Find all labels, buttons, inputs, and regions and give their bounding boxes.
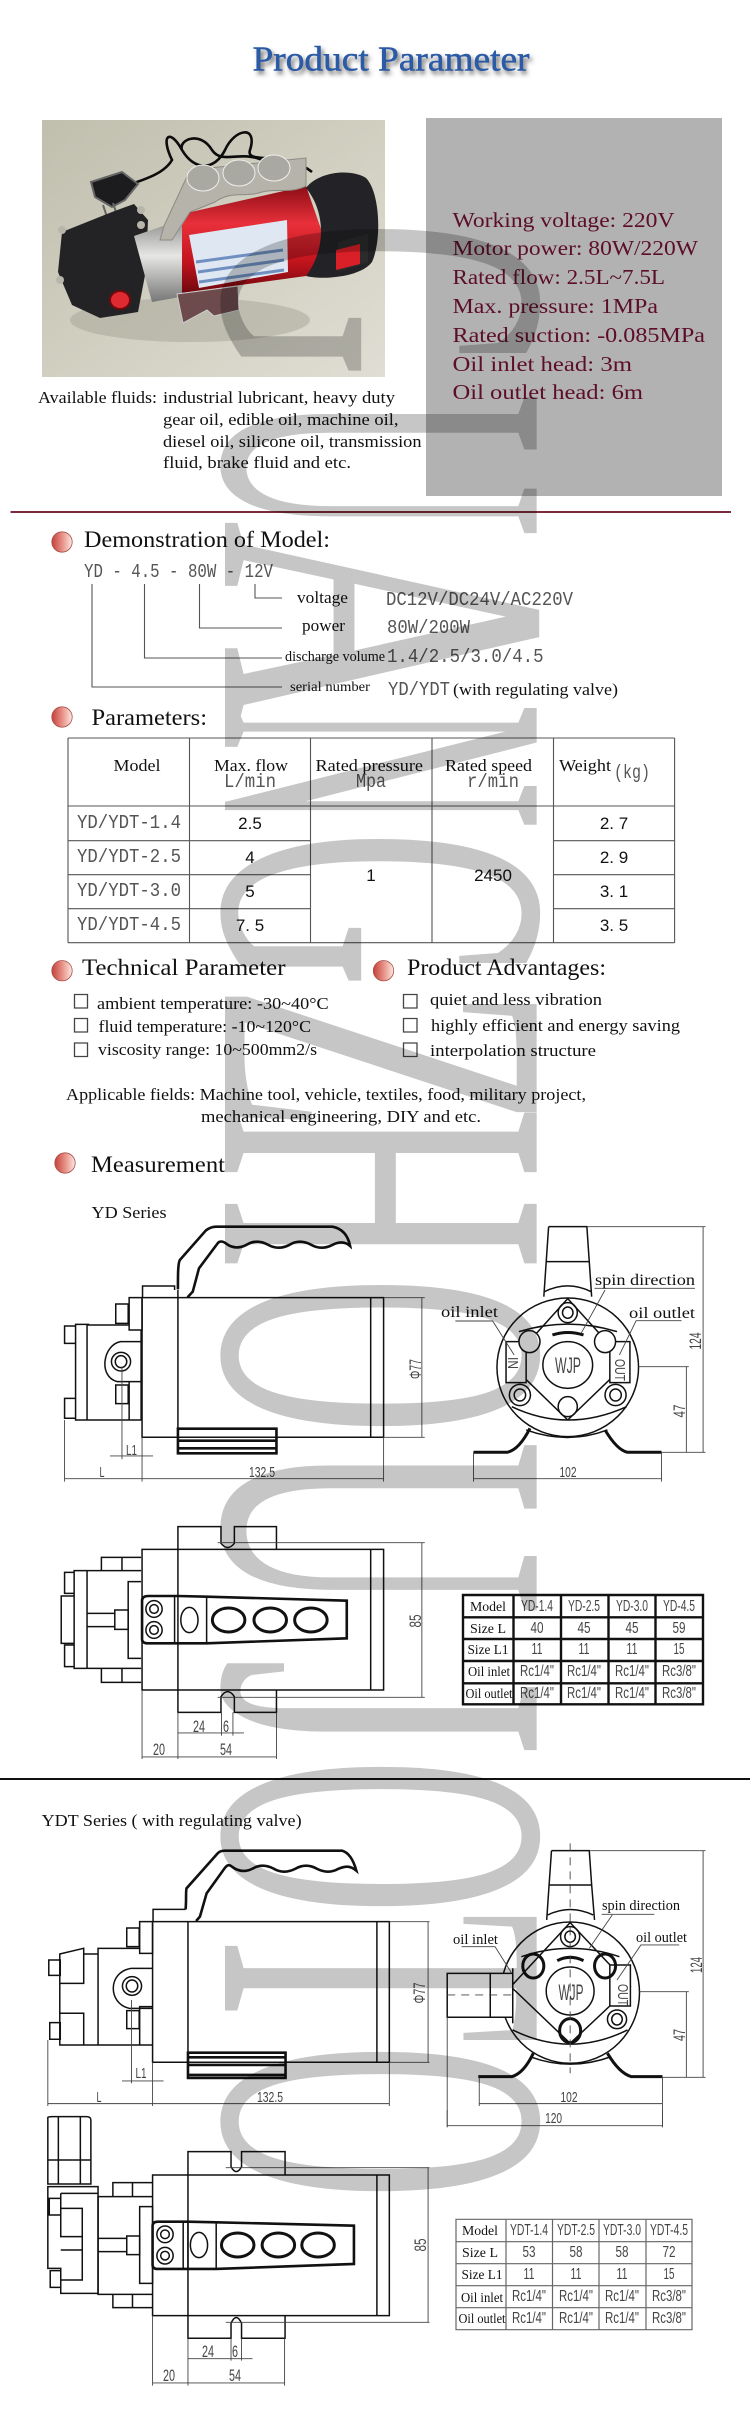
discharge volume row — [285, 646, 544, 668]
icon: black end cap — [306, 173, 378, 278]
bullet — [52, 707, 72, 727]
parameters table: 3. 5 — [600, 916, 628, 935]
technical list: fluid temperature: -10~120°C — [98, 1017, 311, 1036]
table: YDT sizes: YDT-2.5 — [557, 2222, 595, 2239]
parameters table: (kg) — [614, 762, 650, 784]
parameters table: 5 — [245, 882, 255, 901]
available fluids text: diesel oil, silicone oil, transmission — [163, 432, 422, 451]
title: Product Parameter — [252, 40, 530, 78]
table: YDT sizes: Rc3/8" — [652, 2288, 686, 2305]
parameters table: 2. 7 — [600, 814, 628, 833]
table: YD sizes: YD-3.0 — [616, 1598, 648, 1615]
table: YD sizes: 59 — [672, 1620, 686, 1637]
bullet — [52, 532, 72, 552]
heading: Technical Parameter — [82, 955, 286, 980]
serial number row: serial number — [290, 680, 370, 695]
diagram: YD side view: Φ77 — [406, 1359, 425, 1379]
panel: demonstration of model — [52, 527, 618, 701]
diagram: YDT side view: 124 — [687, 1957, 706, 1973]
table: YD sizes: Size L1 — [468, 1643, 508, 1658]
diagram: YDT top view: 6 — [232, 2342, 238, 2361]
diagram: YDT side view: OUT — [614, 1984, 631, 2006]
heading: Product Advantages: — [407, 955, 606, 980]
diagram: YDT side view: L — [96, 2089, 102, 2106]
checkboxes — [74, 994, 88, 1056]
icon: silver collar — [134, 218, 186, 302]
watermark: H — [122, 1106, 649, 1270]
heading: measurement: Measurement — [91, 1152, 226, 1177]
panel: key specifications: Rated suction: -0.085MPa — [452, 323, 706, 347]
available fluids text: industrial lubricant, heavy duty — [163, 388, 396, 407]
diagram: YD top view: 24 — [193, 1717, 205, 1736]
diagram: YD top view: 85 — [406, 1614, 425, 1628]
model leader lines — [92, 584, 282, 687]
table: YDT sizes: Rc3/8" — [652, 2310, 686, 2327]
table: YDT sizes: Rc1/4" — [559, 2288, 593, 2305]
diagram: YDT top view: 85 — [411, 2238, 430, 2252]
technical list: viscosity range: 10~500mm2/s — [98, 1040, 317, 1059]
parameters table: 7. 5 — [236, 916, 264, 935]
table: YDT sizes: 11 — [616, 2266, 628, 2283]
parameters table: 2.5 — [238, 814, 262, 833]
diagram: YDT side view: oil inlet — [453, 1932, 498, 1948]
watermark: G — [121, 830, 648, 987]
power row: 80W/200W — [387, 617, 471, 639]
watermark: T — [122, 1913, 649, 2044]
available fluids text — [38, 388, 422, 472]
watermark: O — [121, 2043, 648, 2200]
heading: YD series: YD Series — [92, 1203, 166, 1222]
icon: power cable — [125, 132, 312, 186]
parameters table: Model — [114, 756, 161, 775]
bullet — [373, 960, 394, 981]
table: YD sizes: Rc1/4" — [520, 1663, 554, 1680]
table: YD sizes: YD-1.4 — [521, 1598, 553, 1615]
parameters table: 2450 — [474, 866, 512, 885]
table: YDT sizes — [456, 2219, 692, 2330]
table: YDT sizes: Rc1/4" — [559, 2310, 593, 2327]
table: YDT sizes: Rc1/4" — [605, 2288, 639, 2305]
table: YDT sizes: Oil inlet — [461, 2291, 503, 2306]
table: YD sizes: Rc1/4" — [615, 1685, 649, 1702]
parameters table: 3. 1 — [600, 882, 628, 901]
table: YDT sizes: YDT-1.4 — [510, 2222, 548, 2239]
discharge volume row: 1.4/2.5/3.0/4.5 — [387, 646, 544, 668]
voltage row: DC12V/DC24V/AC220V — [386, 589, 574, 611]
parameters table: 4 — [245, 848, 255, 867]
serial number row: YD/YDT — [388, 679, 450, 701]
table: YDT sizes: 11 — [570, 2266, 582, 2283]
diagram: YD side view: oil inlet — [441, 1304, 499, 1321]
parameters table: Max. flow — [214, 756, 289, 775]
diagram: YD side view: L — [100, 1464, 104, 1481]
technical list — [97, 994, 329, 1059]
diagram: YDT top view: 54 — [229, 2366, 241, 2385]
diagram: YDT side view — [48, 1843, 706, 2127]
diagram: YD side view: spin direction — [595, 1272, 695, 1289]
panel: key specifications: Rated flow: 2.5L~7.5L — [452, 265, 665, 289]
panel: product advantages — [373, 955, 680, 1060]
available fluids text: fluid, brake fluid and etc. — [163, 453, 351, 472]
table: YD sizes: Rc1/4" — [567, 1685, 601, 1702]
advantages list: interpolation structure — [430, 1041, 596, 1060]
icon: head bolts — [56, 206, 145, 284]
table: YD sizes: 11 — [532, 1641, 543, 1658]
table: YD sizes: 11 — [626, 1641, 638, 1658]
diagram: YDT top view: 20 — [163, 2366, 175, 2385]
power row: power — [302, 616, 345, 635]
panel: key specifications: Working voltage: 220V — [452, 208, 674, 232]
panel: key specifications: Max. pressure: 1MPa — [452, 294, 659, 318]
diagram: YDT top view — [48, 2110, 662, 2386]
watermark — [121, 220, 650, 2200]
parameters table: YD/YDT-1.4 — [77, 812, 181, 834]
table: YD sizes: 15 — [674, 1641, 685, 1658]
discharge volume row: discharge volume — [285, 649, 385, 665]
heading: YDT series: YDT Series ( with regulating valve) — [42, 1811, 302, 1830]
table: YDT sizes: Rc1/4" — [605, 2310, 639, 2327]
serial number row — [290, 679, 618, 701]
watermark: G — [121, 220, 648, 377]
parameters table: 2. 9 — [600, 848, 628, 867]
table: YD sizes: YD-4.5 — [663, 1598, 695, 1615]
icon: red motor body — [182, 186, 322, 293]
table: YDT sizes: YDT-4.5 — [650, 2222, 688, 2239]
applicable fields text: Applicable fields: Machine tool, vehicle, textiles, food, military project, — [66, 1085, 586, 1104]
table: YD sizes — [463, 1595, 703, 1704]
parameters table — [68, 738, 675, 943]
watermark: N — [121, 703, 649, 829]
parameters table: Weight — [559, 756, 611, 775]
parameters table: 1 — [366, 866, 376, 885]
table: YDT sizes: 15 — [664, 2266, 675, 2283]
parameters table: r/min — [467, 771, 519, 793]
bullet — [52, 960, 72, 981]
table: YDT sizes: Oil outlet — [458, 2312, 506, 2327]
table: YDT sizes: Size L — [462, 2246, 498, 2261]
available fluids text: Available fluids: — [38, 388, 157, 407]
diagram: YD side view — [65, 1227, 705, 1482]
diagram: YDT side view: WJP — [558, 1980, 584, 2005]
table: YD sizes: Rc3/8" — [662, 1685, 696, 1702]
diagram: YDT top view: 24 — [202, 2342, 214, 2361]
advantages list: highly efficient and energy saving — [431, 1016, 680, 1035]
diagram: YD side view: oil outlet — [629, 1305, 696, 1322]
watermark: U — [122, 1440, 650, 1615]
parameters table: YD/YDT-3.0 — [77, 880, 181, 902]
table: YD sizes: Rc3/8" — [662, 1663, 696, 1680]
watermark: O — [121, 1758, 648, 1915]
panel: parameters — [52, 705, 675, 943]
table: YD sizes: 40 — [530, 1620, 544, 1637]
available fluids text: gear oil, edible oil, machine oil, — [163, 410, 398, 429]
diagram: YD top view — [61, 1527, 425, 1759]
watermark: O — [121, 1276, 649, 1435]
diagram: YDT side view: 102 — [560, 2089, 578, 2106]
watermark: Z — [122, 985, 650, 1133]
panel: key specifications — [426, 118, 722, 496]
checkboxes — [404, 994, 417, 1056]
table: YD sizes: YD-2.5 — [568, 1598, 600, 1615]
diagram: YD side view: OUT — [611, 1359, 628, 1381]
icon: nameplate — [189, 220, 288, 288]
technical list: ambient temperature: -30~40°C — [97, 994, 329, 1013]
panel: technical parameter — [52, 955, 329, 1059]
table: YD sizes: 11 — [578, 1641, 590, 1658]
table: YD sizes: 45 — [626, 1620, 639, 1637]
applicable fields text — [66, 1085, 586, 1126]
diagram: YD side view: 47 — [670, 1404, 689, 1418]
icon: mounting foot — [177, 286, 239, 323]
diagram: YDT side view: 47 — [670, 2029, 689, 2041]
parameters table: YD/YDT-4.5 — [77, 914, 181, 936]
table: YD sizes: Model — [470, 1600, 506, 1615]
parameters table: YD/YDT-2.5 — [77, 846, 181, 868]
table: YD sizes: 45 — [578, 1620, 591, 1637]
table: YDT sizes: 11 — [524, 2266, 535, 2283]
table: YDT sizes: 58 — [570, 2244, 583, 2261]
heading: Demonstration of Model: — [84, 527, 330, 552]
panel: key specifications: Oil inlet head: 3m — [452, 352, 632, 376]
serial number row: (with regulating valve) — [453, 680, 618, 699]
diagram: YD side view: IN — [504, 1357, 521, 1369]
diagram: YD side view: 132.5 — [249, 1464, 275, 1481]
watermark: J — [121, 1658, 648, 1755]
table: YD sizes: Size L — [470, 1622, 506, 1637]
model code: YD - 4.5 - 80W - 12V — [84, 561, 273, 583]
diagram: YD top view: 54 — [220, 1740, 232, 1759]
title: Product Parameter — [255, 43, 532, 82]
diagram: YDT side view: Φ77 — [410, 1982, 429, 2004]
table: YD sizes: Oil outlet — [466, 1687, 513, 1702]
table: YD sizes: Oil inlet — [468, 1665, 510, 1680]
diagram: YD side view: 124 — [686, 1332, 705, 1350]
table: YD sizes: Rc1/4" — [520, 1685, 554, 1702]
diagram: YD top view: 6 — [223, 1717, 229, 1736]
table: YDT sizes: Size L1 — [462, 2268, 502, 2283]
icon: rocker switch — [336, 234, 368, 272]
parameters table: Rated speed — [445, 756, 533, 775]
table: YDT sizes: 53 — [522, 2244, 536, 2261]
table: YDT sizes: 58 — [616, 2244, 629, 2261]
icon: pump head — [58, 204, 148, 318]
power row — [302, 616, 471, 639]
voltage row: voltage — [297, 588, 348, 607]
diagram: YDT side view: 132.5 — [257, 2089, 283, 2106]
table: YDT sizes: Model — [462, 2224, 498, 2239]
panel: key specifications: Motor power: 80W/220W — [452, 236, 698, 260]
icon: power plug — [91, 172, 138, 220]
watermark: A — [121, 520, 648, 731]
diagram: YD top view: 20 — [153, 1740, 165, 1759]
table: YDT sizes: Rc1/4" — [512, 2288, 546, 2305]
parameters table: Mpa — [356, 771, 386, 793]
diagram: YD side view: WJP — [555, 1353, 581, 1378]
parameters table: L/min — [224, 771, 276, 793]
diagram: YDT side view: spin direction — [602, 1898, 681, 1914]
panel: key specifications: Oil outlet head: 6m — [452, 380, 643, 404]
watermark: U — [122, 393, 649, 537]
diagram: YDT top view: 120 — [545, 2110, 562, 2127]
diagram: YDT side view: oil outlet — [636, 1930, 687, 1946]
table: YD sizes: Rc1/4" — [567, 1663, 601, 1680]
voltage row — [297, 588, 574, 611]
table: YDT sizes: YDT-3.0 — [603, 2222, 641, 2239]
table: YDT sizes: 72 — [662, 2244, 676, 2261]
heading: Parameters: — [92, 705, 207, 730]
icon: silver handle — [160, 158, 306, 240]
icon: outlet port — [110, 291, 130, 309]
diagram: YD side view: 102 — [560, 1464, 576, 1481]
parameters table: Rated pressure — [316, 756, 423, 775]
diagram: YD side view: L1 — [126, 1442, 137, 1459]
applicable fields text: mechanical engineering, DIY and etc. — [201, 1107, 481, 1126]
table: YDT sizes: Rc1/4" — [512, 2310, 546, 2327]
diagram: YDT side view: L1 — [136, 2065, 146, 2082]
advantages list: quiet and less vibration — [430, 990, 602, 1009]
panel: product photo — [42, 120, 385, 377]
table: YD sizes: Rc1/4" — [615, 1663, 649, 1680]
advantages list — [430, 990, 680, 1060]
